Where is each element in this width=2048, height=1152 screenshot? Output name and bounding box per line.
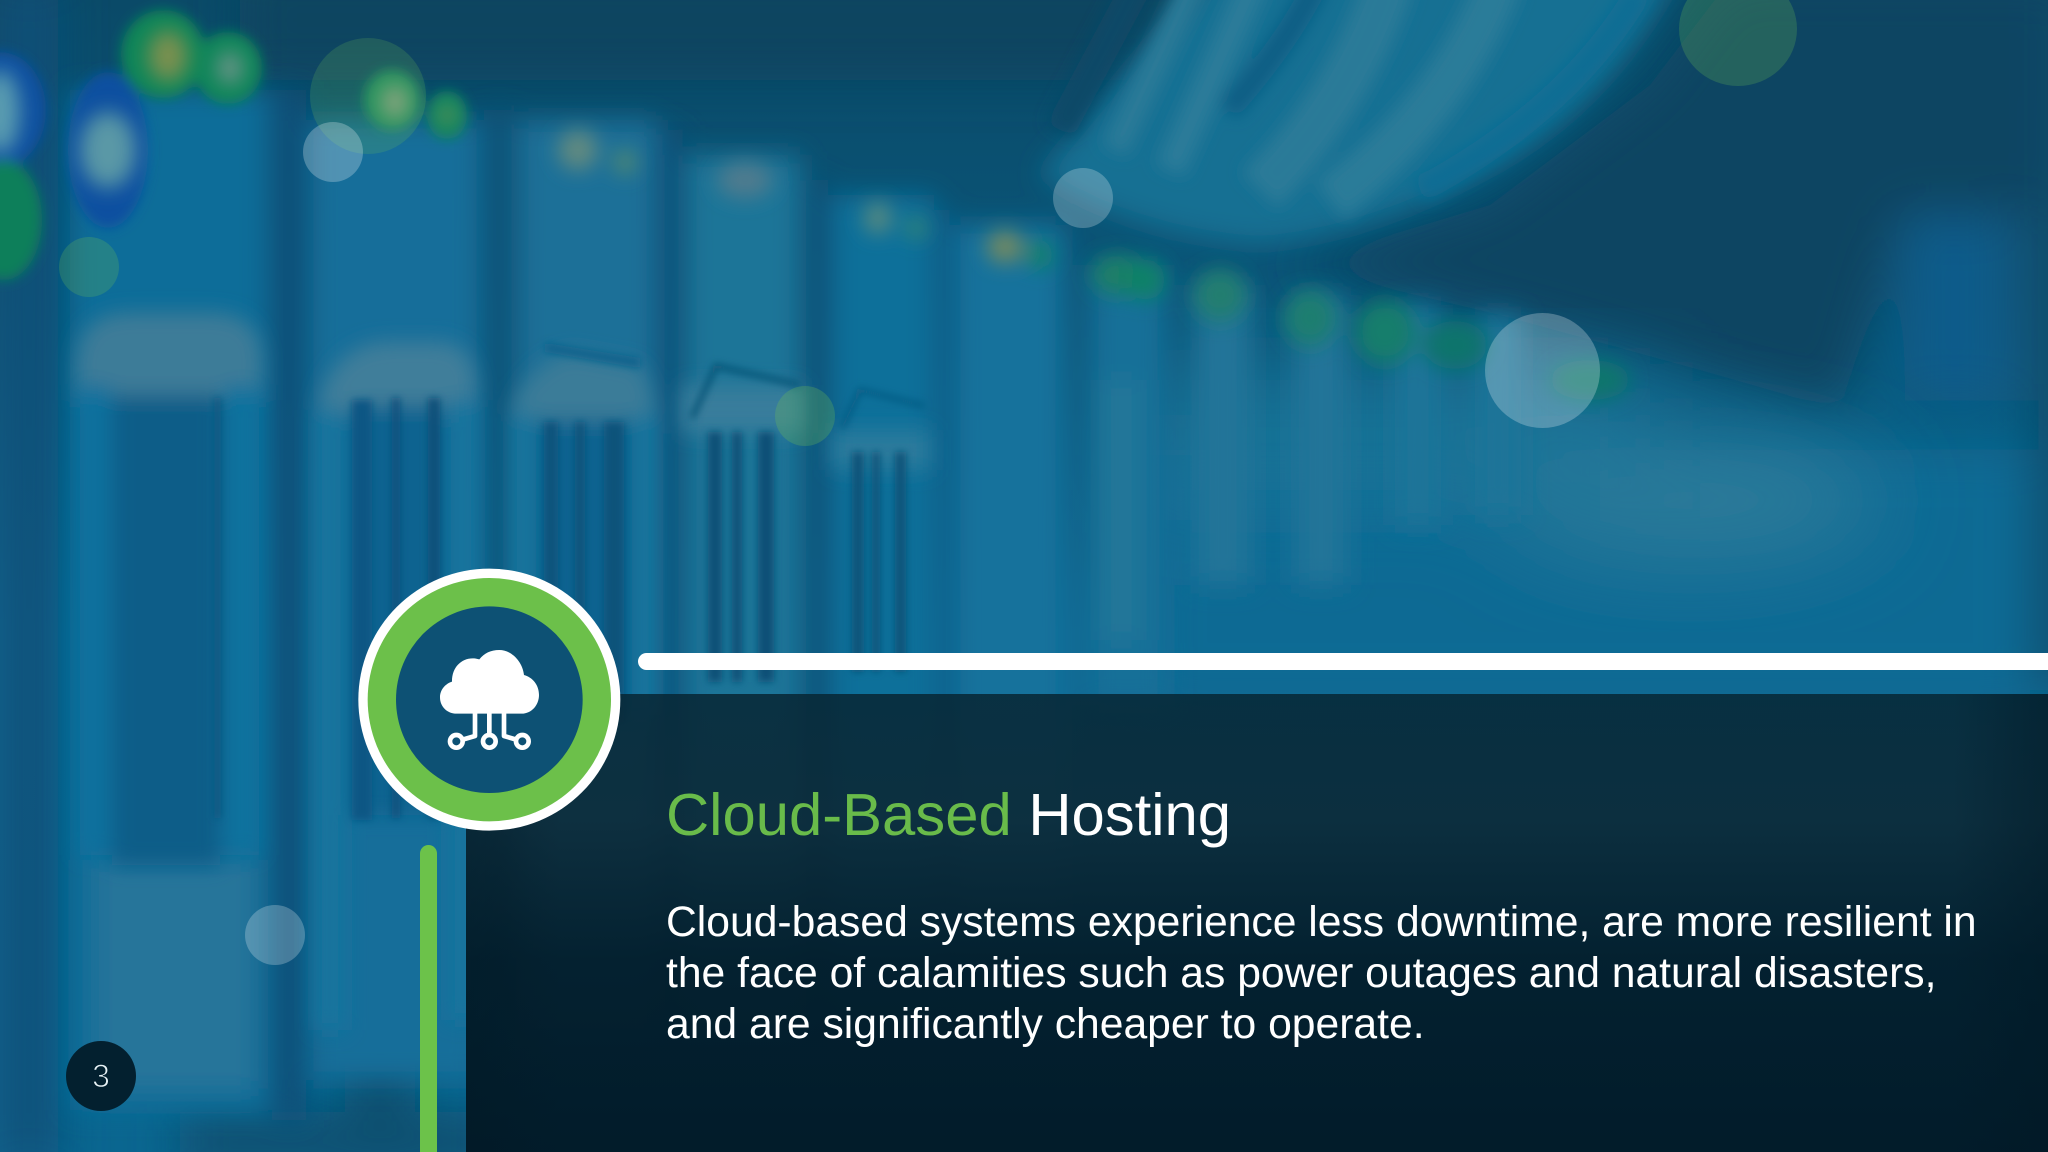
bubble: large white right: [1485, 313, 1600, 428]
bubble: large green top right: [1679, 0, 1797, 86]
body text: [666, 898, 1977, 1048]
body text: the face of calamities such as power outages and natural disasters,: [666, 949, 1936, 997]
bubble: white centre top: [1053, 168, 1113, 228]
green vertical bar: [420, 845, 437, 1152]
racks: [70, 90, 268, 1110]
slot and latch detail: [214, 398, 221, 818]
page number badge: 3: [92, 1058, 110, 1094]
white horizontal rule: [638, 653, 2048, 670]
LED glows: [0, 52, 46, 168]
heading: Cloud-Based Hosting: [666, 781, 1231, 848]
bubble: white lower left: [245, 905, 305, 965]
body text: Cloud-based systems experience less downtime, are more resilient in: [666, 898, 1977, 946]
cable fan: [1040, 0, 1680, 245]
bubble: green left: [59, 237, 119, 297]
cable strands: [1060, 0, 1140, 130]
bubble: green centre: [775, 386, 835, 446]
page number badge: [66, 1041, 136, 1111]
icon badge: cloud network: [358, 568, 620, 831]
body text: and are significantly cheaper to operate.: [666, 1000, 1425, 1048]
handle arcs: [76, 313, 262, 400]
bubble: large green top left: [310, 38, 426, 154]
latches: [692, 366, 800, 418]
lower rack panels: [95, 860, 255, 1090]
bubble: white top left: [303, 122, 363, 182]
dark text panel: [466, 694, 2048, 1152]
